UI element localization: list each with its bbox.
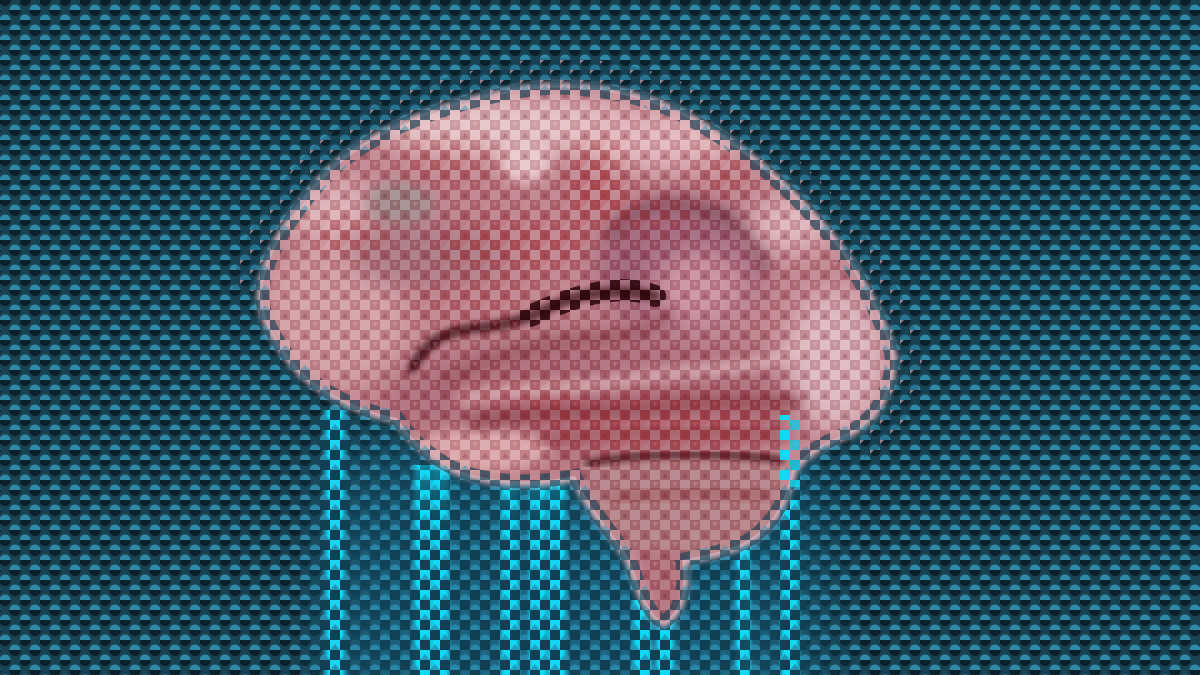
cerebellum	[584, 460, 786, 554]
parietal mauve lobe	[595, 200, 765, 330]
soft upper highlight centre	[499, 138, 551, 182]
temporal lobe tone	[380, 330, 820, 470]
cool blue tint and cyan light streaks below the brain	[300, 410, 860, 675]
soft red checker clusters in the folds	[304, 132, 780, 465]
dithered brain edge	[262, 88, 892, 622]
broken dark fissure cells	[530, 290, 655, 316]
frontal lobe highlight	[260, 245, 410, 385]
temporal folds	[460, 345, 810, 400]
glass check texture	[262, 88, 892, 622]
cyan streak crossing the brain's rear	[780, 415, 800, 487]
occipital highlight	[785, 290, 885, 430]
lower left light	[410, 428, 550, 472]
brain stem	[637, 550, 683, 616]
pink halo scattered around the brain	[262, 88, 892, 432]
brain rim glow	[262, 88, 892, 622]
brain	[262, 88, 892, 622]
upper highlight	[370, 95, 630, 155]
grey fold	[366, 181, 434, 229]
sylvian fissure	[412, 292, 655, 368]
